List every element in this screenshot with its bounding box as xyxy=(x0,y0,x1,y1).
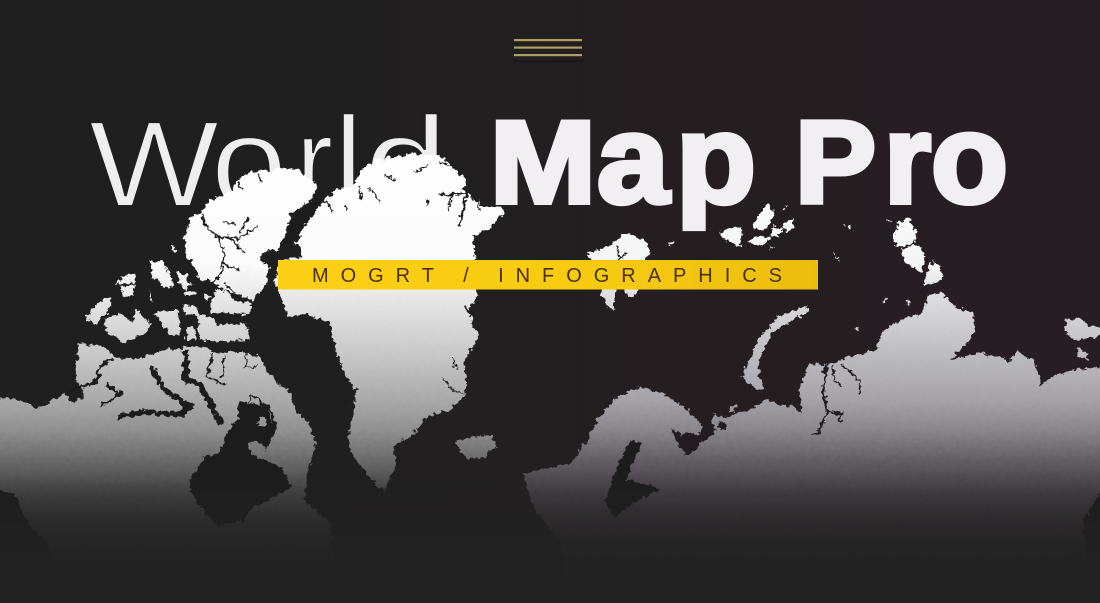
title: Map Pro (bold): o xyxy=(931,88,1008,230)
title: World (light) xyxy=(89,91,448,234)
title: Map Pro (bold): M xyxy=(490,96,596,228)
map: Arctic Russia islands xyxy=(589,203,1100,413)
map: Eurasia mainland xyxy=(523,292,1100,603)
Ellesmere and Baffin region xyxy=(184,167,317,300)
fjords xyxy=(324,163,481,403)
Arctic gulfs xyxy=(811,363,860,434)
title: World (light): r xyxy=(296,91,333,234)
title: Map Pro (bold): r xyxy=(884,88,931,230)
Baltic Sea xyxy=(606,440,659,520)
Hudson Bay xyxy=(189,395,291,527)
title: World (light): l xyxy=(334,91,363,234)
New Siberian islands xyxy=(1066,318,1100,340)
subtitle text: MOGRT / INFOGRAPHICS xyxy=(312,265,782,287)
title: World (light): d xyxy=(364,91,448,234)
title: Map Pro (bold) xyxy=(490,88,1008,230)
Novaya Zemlya xyxy=(742,305,807,390)
Svalbard xyxy=(589,232,650,310)
map: Greenland xyxy=(274,153,503,492)
small islands xyxy=(84,297,112,323)
title: World (light): W xyxy=(89,96,219,232)
title xyxy=(89,88,1008,234)
title: Map Pro (bold): P xyxy=(795,96,876,228)
Franz Josef Land xyxy=(718,227,743,247)
map: Iceland xyxy=(456,435,496,458)
Kolguev island xyxy=(729,406,736,413)
Severnaya Zemlya xyxy=(892,218,917,247)
bottom fade xyxy=(0,470,1100,603)
map: arctic islands of Canada xyxy=(84,167,317,343)
far west sea edge xyxy=(0,487,63,603)
menu icon: three gold lines xyxy=(514,39,582,62)
title: World (light): o xyxy=(211,91,287,234)
channels xyxy=(67,350,256,423)
title: Map Pro (bold): a xyxy=(597,88,670,230)
Nares strait xyxy=(284,195,324,245)
White Sea xyxy=(671,413,715,455)
title: Map Pro (bold): p xyxy=(676,88,756,230)
island inside the bay xyxy=(258,417,267,427)
map: North America mainland xyxy=(0,343,337,603)
subtitle band xyxy=(278,260,818,290)
far east sea edge xyxy=(1083,493,1100,603)
yellow band xyxy=(278,260,818,290)
channel network xyxy=(202,173,261,293)
